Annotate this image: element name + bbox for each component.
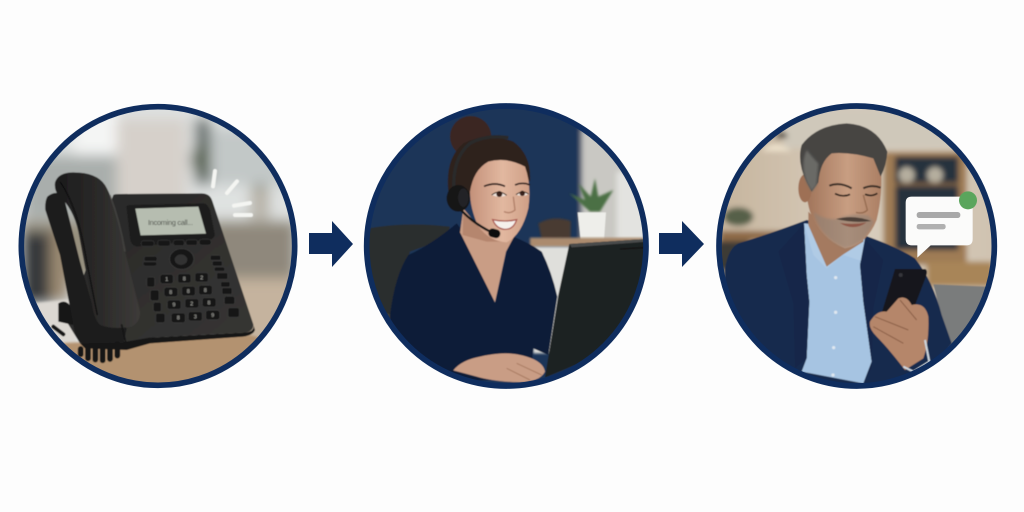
shirt buttons [831,276,837,377]
face [470,160,529,242]
keypad: 8 [207,300,211,306]
blurred living room background [722,108,992,302]
eyebrows and eyes [829,184,881,188]
man [725,123,952,388]
keypad: 2 [190,301,193,307]
desk surface [36,299,76,343]
handset [45,172,140,343]
message bubble [906,191,977,258]
nose [856,195,867,213]
keypad: 9 [211,313,214,319]
panel: customer reading smartphone message [713,95,1000,395]
neck and chest [460,208,515,302]
green notification dot [959,191,977,209]
shirt cuff [903,340,929,372]
eyebrows [484,183,530,186]
agent [390,116,557,382]
keypad: 8 [187,289,190,295]
forearm and hand [453,353,545,382]
arrow: second step [659,221,704,267]
circle border [719,106,994,386]
hair back and bun [450,116,492,152]
keypad [147,255,239,323]
smile [493,220,517,229]
lapels [803,224,810,358]
circle border [21,107,295,385]
keypad: 8 [204,288,207,294]
office chair [367,225,450,315]
office wall background [370,108,643,384]
hand [870,297,928,370]
phone base [67,193,255,350]
keypad: 8 [177,316,180,322]
keypad: 1 [165,277,168,283]
phone screen with text: Incoming call... [148,218,193,227]
torso [390,223,557,382]
keypad: 8 [183,276,186,282]
circle border [367,106,646,386]
panel: headset agent [360,95,652,395]
keypad: 2 [200,275,203,281]
panel: incoming call desk phone [18,104,298,388]
beard [813,212,874,248]
potted plant [538,178,613,240]
smile and moustache [836,217,871,222]
soft keys [141,239,211,266]
neck [808,212,863,267]
smartphone [875,269,927,335]
phone screen with text [135,207,206,235]
hair [800,123,887,192]
blurred office background [24,110,292,343]
navigation pad [170,249,194,269]
sofa [933,284,987,348]
ringing lines [213,171,251,215]
headset [447,137,508,239]
keypad: 3 [194,314,197,320]
keypad: 8 [169,290,172,296]
ear [798,174,812,202]
shirt [802,223,872,383]
keypad: 9 [172,303,176,309]
nose [504,197,515,213]
message lines [917,212,960,218]
face [807,152,882,248]
desk [530,238,647,247]
arrow: first step [309,221,353,267]
eyes [492,191,529,197]
computer monitor [545,239,647,378]
coiled cord [53,325,127,360]
jacket [725,220,952,388]
